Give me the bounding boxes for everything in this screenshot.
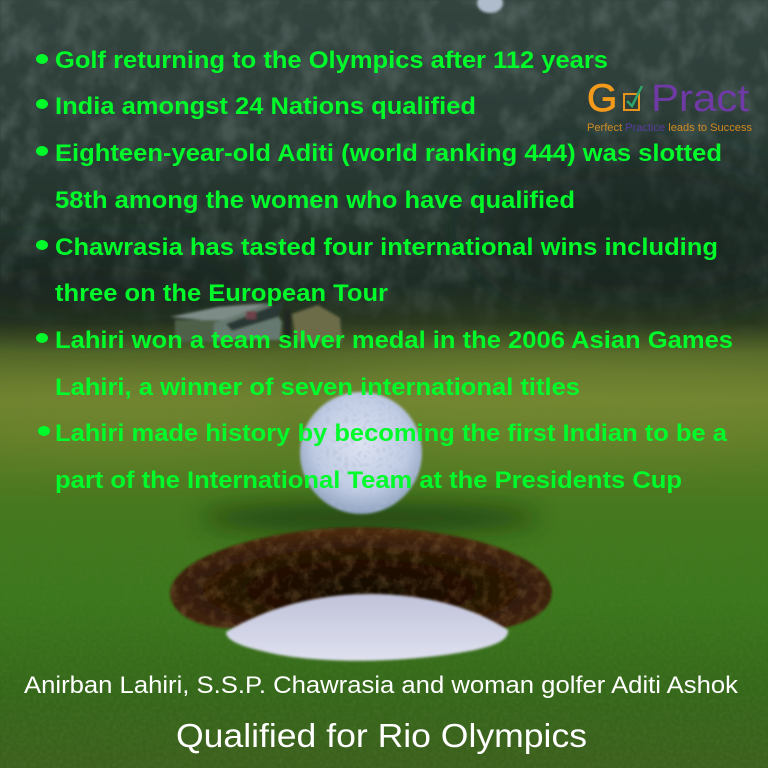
bullet 3 text: Eighteen-year-old Aditi (world ranking 444) was slotted [55,140,722,167]
bullet list [36,47,733,494]
title: Qualified for Rio Olympics: Qualified for Rio Olympics [176,718,587,755]
bullet 1 text: Golf returning to the Olympics after 112 years [55,47,608,74]
bullet 2 [36,99,48,109]
bullet 3 text: 58th among the women who have qualified [55,187,575,214]
forest texture [0,0,768,340]
caption: golfers: Anirban Lahiri, S.S.P. Chawrasia and woman golfer Aditi Ashok [24,672,739,699]
bullet 4 text: Chawrasia has tasted four international wins including [55,234,718,261]
dark forest masses [470,150,768,310]
bullet 4 text [55,234,718,307]
logo letter G: G [587,77,617,120]
bullet 5 text [55,327,733,401]
ball shadow [200,503,540,533]
bullet 1 [36,54,48,64]
blurred light bands on the green [320,355,768,445]
white cup interior [226,594,508,661]
bullet 5 text: Lahiri won a team silver medal in the 2006 Asian Games [55,327,733,354]
golf ball [300,392,422,514]
distant house [170,301,342,342]
sky gap in trees [477,0,503,13]
logo tagline: Perfect Practice leads to Success [587,122,752,134]
bullet 2 text: India amongst 24 Nations qualified [55,93,476,120]
bullet 3 [36,146,48,156]
bullet 6 text: Lahiri made history by becoming the first Indian to be a [55,420,727,447]
logo: GoPract [587,77,752,134]
bullet 6 text: part of the International Team at the Presidents Cup [55,467,682,494]
bullet 6 text [55,420,727,494]
bullet 5 [36,333,48,343]
icon: checkbox with tick [624,86,642,110]
bullet 4 [36,240,48,250]
grass texture [58,664,750,766]
bullet 6 [38,426,50,436]
bullet 4 text: three on the European Tour [55,280,388,307]
bullet 5 text: Lahiri, a winner of seven international titles [55,374,580,401]
cup hole [165,525,560,661]
bullet 3 text [55,140,722,214]
logo word Pract: Pract [651,78,749,120]
